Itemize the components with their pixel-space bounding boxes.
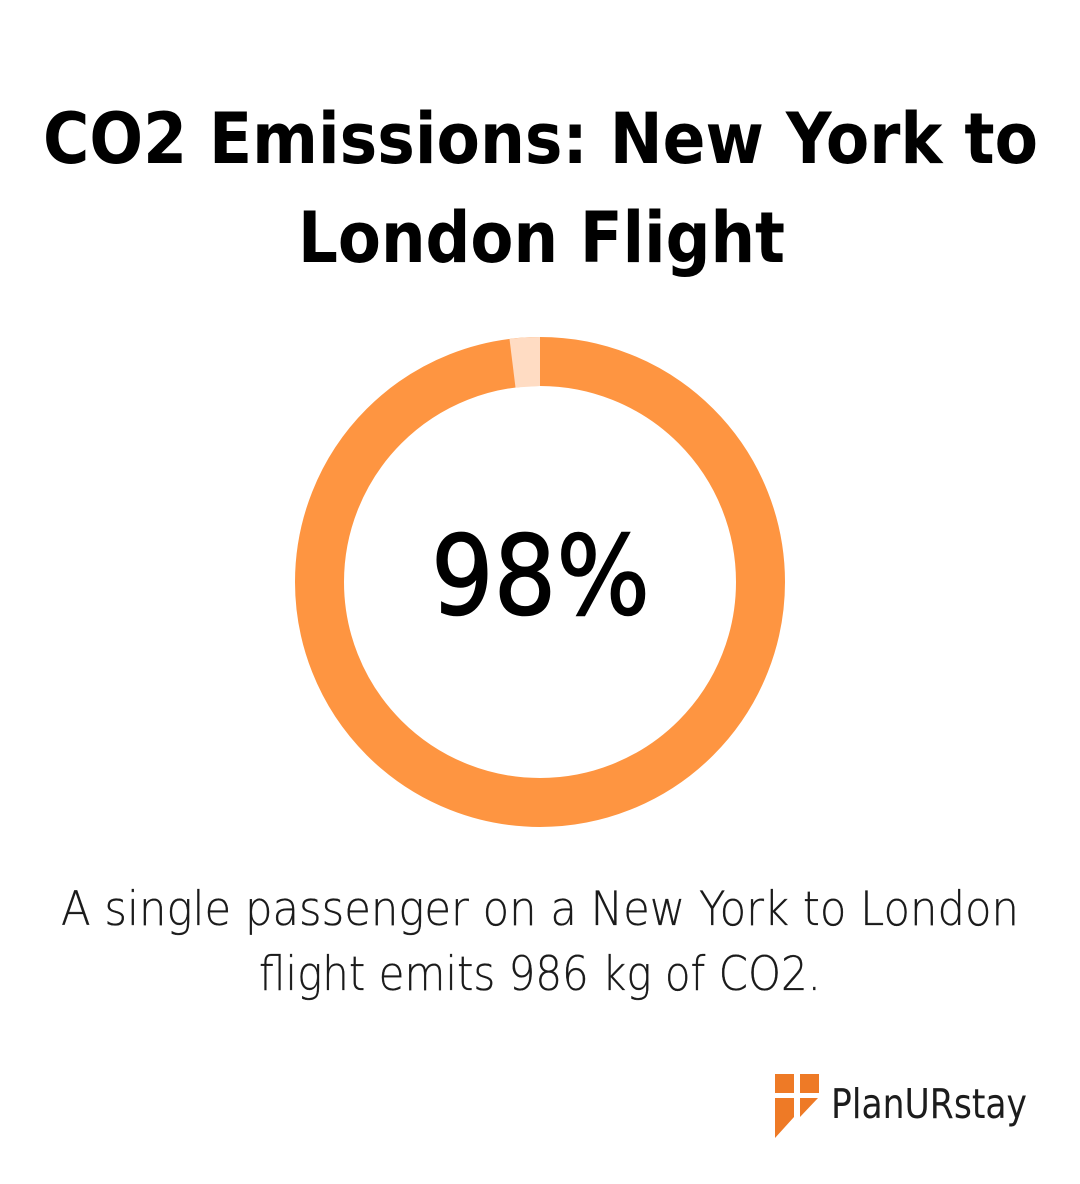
description text: flight emits 986 kg of CO2. xyxy=(259,947,821,1002)
title xyxy=(43,98,1038,279)
description text xyxy=(61,882,1019,1002)
donut remainder segment xyxy=(510,337,540,388)
logo: PlanURstay xyxy=(775,1074,1027,1138)
description text: A single passenger on a New York to London xyxy=(61,882,1019,937)
title: London Flight xyxy=(298,197,785,279)
donut chart: 98% xyxy=(320,337,760,802)
logo wordmark: PlanURstay xyxy=(831,1080,1027,1128)
icon: logo mark xyxy=(775,1074,819,1138)
center percentage: 98% xyxy=(431,512,650,640)
